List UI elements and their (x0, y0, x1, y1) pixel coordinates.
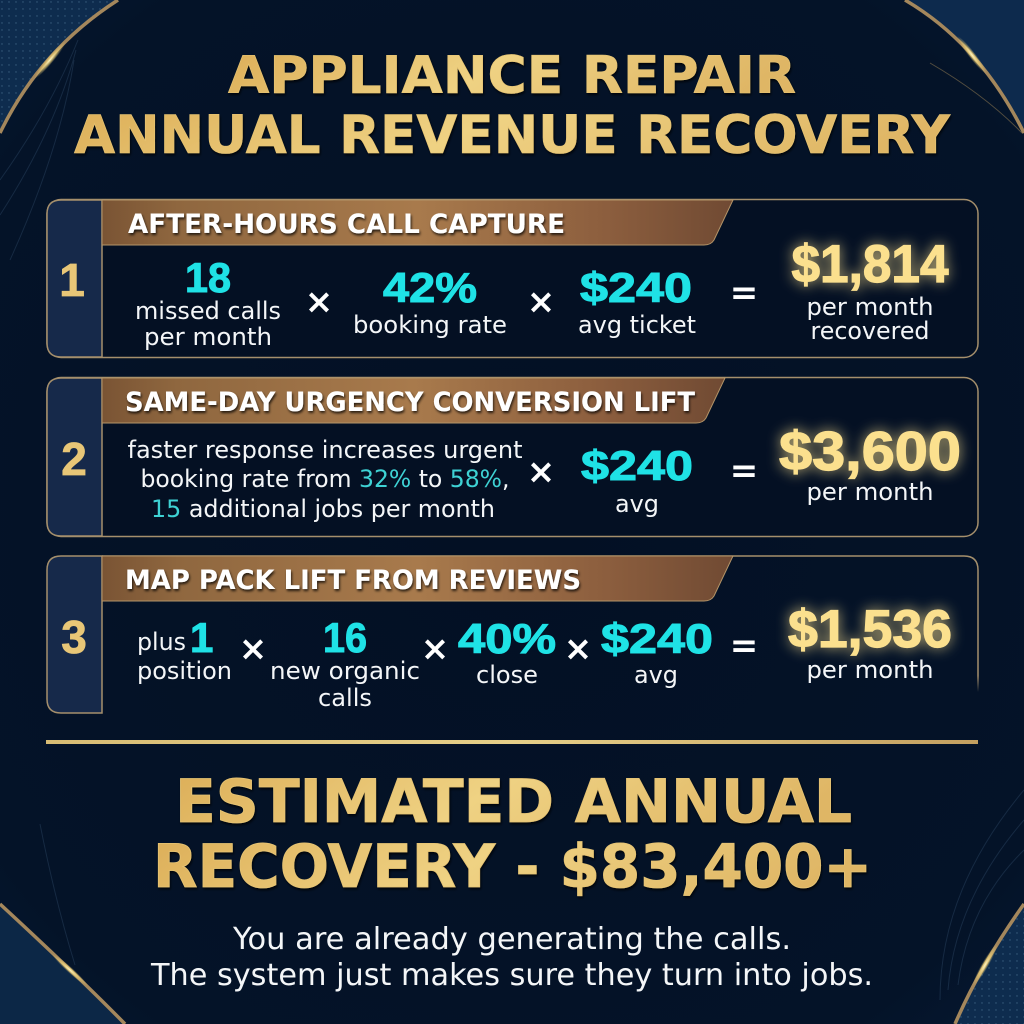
header band (102, 556, 733, 601)
$240 avg: avg (615, 490, 659, 518)
number tab 3 (47, 556, 102, 713)
$240 avg ticket: avg ticket (578, 311, 696, 339)
number tab 2 (47, 378, 102, 536)
plus 1 position: plus (137, 628, 186, 656)
description: faster response increases urgent (128, 436, 522, 464)
description: booking rate from 32% to 58%, (140, 465, 509, 493)
$240 avg (581, 442, 693, 518)
$1,536 result: per month (806, 656, 934, 684)
18 missed calls (135, 254, 281, 351)
plus 1 position: position (137, 657, 232, 685)
$1,814 result: $1,814 (792, 235, 949, 294)
16 new organic calls: 16 (323, 614, 367, 661)
$3,600 result: $3,600 (779, 420, 961, 482)
title: ANNUAL REVENUE RECOVERY (74, 105, 951, 166)
closing statement: You are already generating the calls. (232, 922, 791, 957)
description (128, 436, 522, 523)
$1,814 result: per month (806, 293, 934, 321)
42% booking rate: 42% (383, 264, 477, 311)
number tab 1: 1 (59, 254, 85, 306)
16 new organic calls: calls (318, 684, 372, 712)
title (74, 46, 951, 166)
header band: AFTER-HOURS CALL CAPTURE (128, 209, 565, 240)
panel 1: after-hours call capture (47, 200, 978, 358)
header band: MAP PACK LIFT FROM REVIEWS (125, 565, 581, 596)
multiply: × (527, 282, 555, 322)
$240 avg ticket (578, 264, 696, 339)
equals: = (730, 451, 758, 491)
number tab 3: 3 (61, 611, 87, 663)
panel 2: same-day urgency conversion lift (47, 378, 978, 536)
equals: = (730, 626, 758, 666)
$240 avg: avg (634, 661, 678, 689)
18 missed calls: per month (144, 323, 272, 351)
40% close: 40% (458, 615, 556, 662)
annual recovery total: ESTIMATED ANNUAL (175, 767, 852, 837)
header band: SAME-DAY URGENCY CONVERSION LIFT (125, 387, 696, 418)
number tab 2: 2 (61, 433, 87, 485)
multiply: × (527, 452, 555, 492)
16 new organic calls (270, 614, 420, 712)
title: APPLIANCE REPAIR (228, 46, 796, 106)
$1,536 result (788, 600, 952, 684)
$1,814 result (792, 235, 949, 345)
$240 avg (601, 615, 713, 689)
multiply: × (239, 629, 267, 669)
40% close (458, 615, 556, 689)
40% close: close (476, 661, 538, 689)
annual recovery total (153, 767, 872, 902)
multiply: × (305, 282, 333, 322)
plus 1 position: 1 (190, 614, 213, 661)
closing statement: The system just makes sure they turn into jobs. (150, 958, 873, 993)
multiply: × (564, 629, 592, 669)
plus 1 position (137, 614, 232, 685)
$3,600 result: per month (806, 478, 934, 506)
42% booking rate: booking rate (353, 311, 507, 339)
header band (102, 200, 733, 245)
18 missed calls: missed calls (135, 297, 281, 325)
multiply: × (421, 629, 449, 669)
$240 avg: $240 (601, 615, 713, 662)
$240 avg: $240 (581, 442, 693, 489)
header band (102, 378, 725, 423)
18 missed calls: 18 (185, 254, 231, 301)
description: 15 additional jobs per month (151, 495, 495, 523)
42% booking rate (353, 264, 507, 339)
closing statement (150, 922, 873, 993)
$240 avg ticket: $240 (580, 264, 692, 311)
annual recovery total: RECOVERY - $83,400+ (153, 832, 872, 902)
$1,536 result: $1,536 (788, 600, 952, 659)
$3,600 result (779, 420, 961, 506)
number tab 1 (47, 200, 102, 357)
panel 3: map pack lift from reviews (47, 556, 978, 713)
16 new organic calls: new organic (270, 657, 420, 685)
$1,814 result: recovered (810, 317, 930, 345)
equals: = (730, 273, 758, 313)
